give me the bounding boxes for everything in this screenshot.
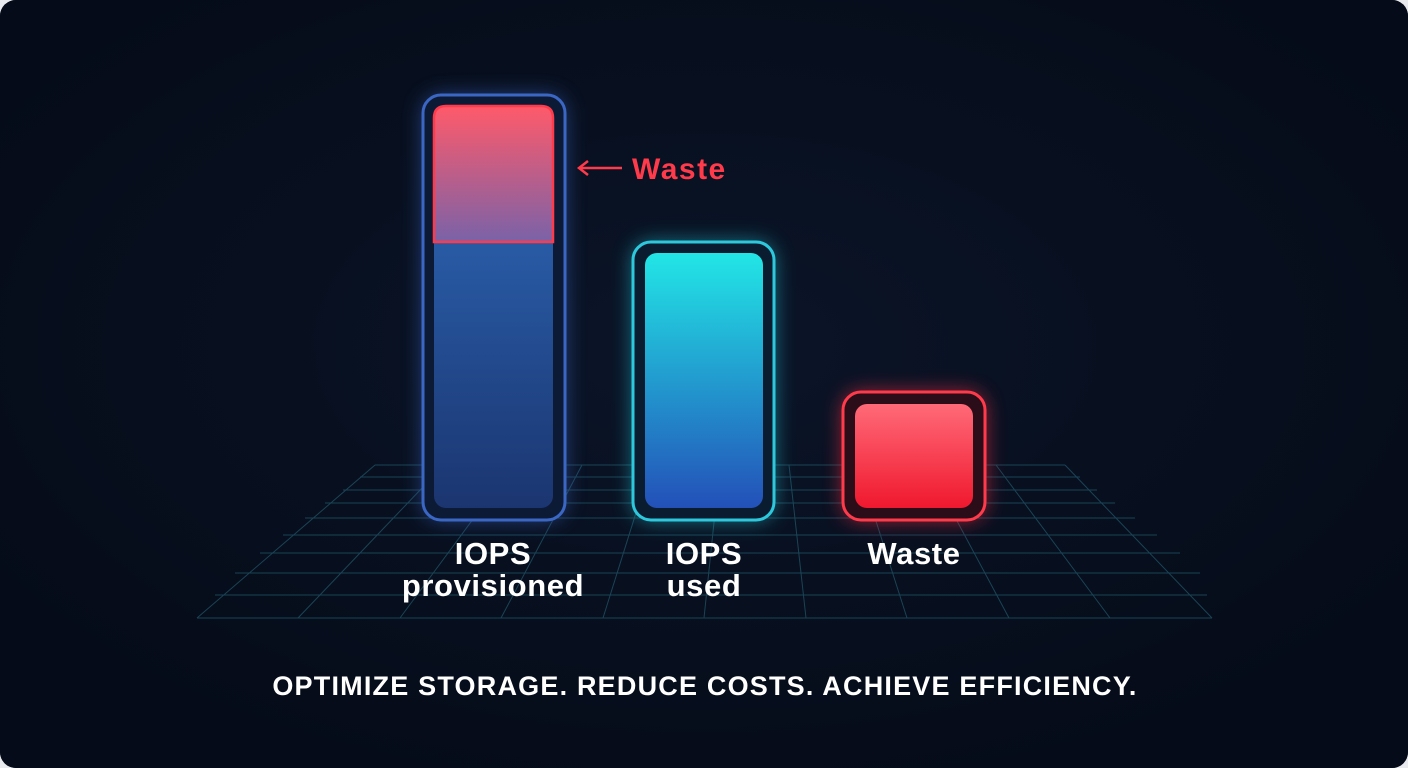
bar: IOPS used [633, 242, 774, 520]
tagline: OPTIMIZE STORAGE. REDUCE COSTS. ACHIEVE EFFICIENCY. [272, 671, 1138, 701]
grid floor [197, 465, 1212, 618]
label: IOPS provisioned: IOPS [455, 536, 531, 571]
label: IOPS used: IOPS [666, 536, 742, 571]
callout: waste arrow: Waste [632, 153, 727, 186]
label: Waste: Waste [867, 536, 961, 571]
bar: IOPS provisioned [423, 95, 565, 520]
bar: Waste [843, 392, 985, 520]
callout: waste arrow [579, 153, 727, 186]
label: IOPS provisioned: provisioned [402, 568, 584, 603]
label: IOPS used: used [667, 568, 741, 603]
